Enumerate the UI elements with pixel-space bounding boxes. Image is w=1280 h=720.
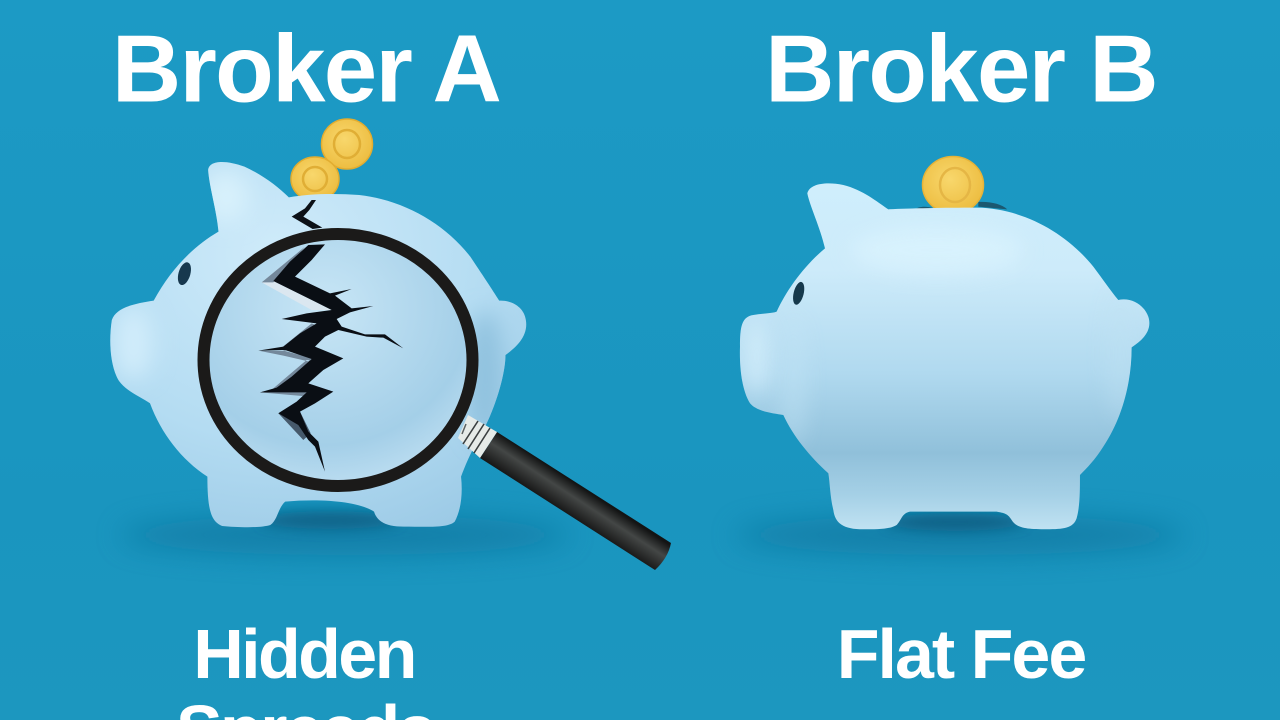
- magnified crack: [258, 244, 403, 472]
- title: Broker B: Broker B: [765, 16, 1157, 122]
- piggy bank B: [740, 183, 1149, 529]
- body A: [110, 162, 526, 527]
- crack dark facet: [278, 412, 311, 440]
- label: Flat Fee: Flat Fee: [837, 615, 1085, 693]
- slot on Broker B: [913, 202, 1007, 211]
- piggy bank A: [110, 162, 526, 527]
- coin lower on Broker A: [291, 157, 339, 201]
- crack black: [258, 244, 403, 472]
- eye A: [176, 261, 193, 286]
- crack grey facets: [258, 247, 317, 396]
- eye B: [791, 281, 806, 306]
- coin on Broker B: [922, 156, 984, 214]
- label: Hidden Spreads: Hidden: [193, 615, 415, 693]
- crack light facets: [262, 247, 332, 310]
- floor shadow under piggy bank A: [120, 511, 570, 555]
- magnifying glass lens and ring: [204, 234, 472, 486]
- shading A: [115, 170, 504, 443]
- label: Hidden Spreads: [176, 615, 435, 720]
- magnifying glass collar: [458, 415, 497, 458]
- shading B: [743, 227, 1133, 447]
- magnifying glass handle: [480, 432, 671, 570]
- coin upper on Broker A: [322, 119, 372, 169]
- crack above lens: [292, 200, 322, 229]
- title: Broker A: Broker A: [112, 16, 500, 122]
- floor shadow under piggy bank B: [735, 513, 1185, 555]
- body B: [740, 183, 1149, 529]
